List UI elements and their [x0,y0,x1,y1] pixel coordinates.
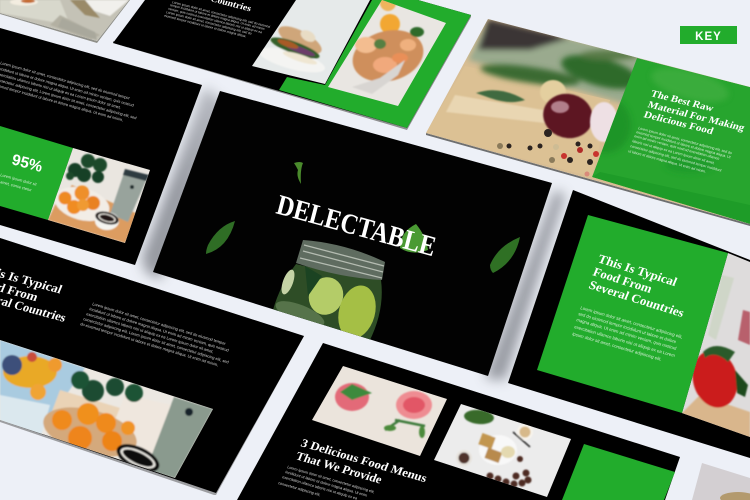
photo: chocolate and buns [434,404,571,497]
lorem text: ut labore et dolore magna aliqua. Ut enim ad minim. [628,149,707,174]
slide: raw material photo [426,19,750,226]
lorem text: Lorem ipsum dolor sit amet, consectetur adipiscing elit, sed do eiusmod tempor [92,301,227,346]
heading [587,252,686,320]
leaf left [206,221,235,254]
heading: Delicious Food [642,110,715,137]
lorem text: eiusmod tempor incididunt ut labore et dolore magna aliqua. [164,14,247,38]
lorem text: do eiusmod tempor incididunt ut labore et dolore magna aliqua. Ut enim ad minim, [80,321,219,367]
slide shadows [140,90,565,380]
photo: oranges and flask [48,148,150,243]
slide: 95% stat [0,28,202,265]
photo: plated pie [328,0,446,106]
lorem text: consectetur adipiscing elit, [278,481,321,497]
leaf right [490,237,520,273]
KEY badge [680,26,737,44]
photo: watermelon drink [312,366,447,456]
lorem text: veniam, quis nostrud exercitation ullamco laboris nisi ut aliquip ex ea [168,7,263,34]
heading: Food From [591,265,654,296]
green stat panel: 95% [10,151,44,176]
heading: This Is Typical [596,252,680,289]
lorem text: incididunt ut labore et dolore magna aliqua. Ut enim [285,470,368,498]
lorem text: eiusmod tempor incididunt ut labore et dolore magna aliqua. Ut [636,130,731,159]
heading [642,89,747,137]
heading: Material For Making [646,100,747,134]
lorem text: sed do eiusmod tempor incididunt ut labore et dolore [578,311,677,344]
lorem text: ipsum dolor sit amet, consectetur adipiscing elit. [572,331,662,362]
lorem text [572,305,683,362]
lorem text: Lorem ipsum dolor sit amet, consectetur adipiscing elit, sed do [638,126,732,155]
lorem text: Lorem ipsum dolor sit amet, consectetur adipiscing elit, sed do eiusmod tempor [0,60,131,101]
lorem text: exercitation ullamco laboris nisi ut aliquip ex ea Lorem [574,324,676,358]
green overlay panel [579,58,750,224]
lorem text [628,126,732,174]
leaf behind title [400,224,428,253]
green stat panel: Lorem ipsum dolor sit [0,172,38,187]
lorem text: Lorem ipsum dolor sit amet, consectetur adipiscing elit, [580,305,683,340]
leaf top [294,162,303,184]
slide: lower-left text with photo [0,238,304,495]
lorem text: incididunt ut labore et dolore magna aliqua. Ut enim ad minim veniam, quis nostrud [0,66,135,108]
photo: sandwich [252,0,370,84]
lorem text: Lorem ipsum dolor sit amet, consectetur adipiscing elit, [287,465,375,494]
lorem text: exercitation ullamco laboris nisi ut aliquip ex ea Lorem ipsum dolor sit amet, [0,71,122,110]
slide: title DELECTABLE [153,91,552,376]
lorem text: exercitation ullamco laboris nisi ut aliquip ex ea [282,475,358,500]
lorem text: tempor incididunt ut labore et dolore magna aliqua. Ut enim ad minim [170,3,266,31]
title: DELECTABLE [273,189,439,263]
lorem text: Lorem ipsum dolor sit amet, consectetur adipiscing elit, sed do [166,10,252,36]
lorem text [164,0,271,38]
heading: The Best Raw [649,89,715,114]
heading: Several Countries [587,278,686,320]
slide: two food photos top [113,0,471,130]
photo: oranges, flask and flowers [0,340,213,478]
slide: three food menus [237,343,680,500]
photo: strawberry [680,253,750,440]
lorem text: Lorem ipsum dolor sit amet, consectetur adipiscing elit, sed do eiusmod [172,0,271,29]
heading [0,262,68,324]
lorem text: exercitation ullamco laboris nisi ut aliquip ex ea Lorem ipsum dolor sit amet, [86,311,214,354]
green stat panel [0,126,73,220]
lorem text: consectetur adipiscing elit, Lorem ipsum dolor sit amet, consectetur adipiscing elit, sed [83,316,230,365]
green panel [537,215,728,413]
green stat panel: amet, conse ctetur [0,179,33,193]
lorem text: consectetur adipiscing elit, sed do eiusmod tempor incididunt [630,144,722,173]
jar [273,240,385,343]
heading: That We Provide [294,449,384,486]
lorem text: enim ad minim veniam, quis nostrud exercitation ullamco [634,134,720,161]
slide: marble corner photo [692,463,750,500]
green panel [562,444,675,500]
slide: chef photo top left [0,0,130,43]
KEY badge: KEY [695,31,722,43]
lorem text: incididunt ut labore et dolore magna aliqua. Ut enim ad minim veniam, quis nostrud [89,306,230,353]
lorem text: laboris nisi ut aliquip ex ea Lorem ipsum dolor sit amet, [632,139,715,165]
lorem text: magna aliqua. Ut enim ad minim veniam, quis nostrud [576,317,678,351]
heading: 3 Delicious Food Menus [299,436,429,485]
green panel [279,0,471,128]
slide: typical food green panel [508,190,750,458]
